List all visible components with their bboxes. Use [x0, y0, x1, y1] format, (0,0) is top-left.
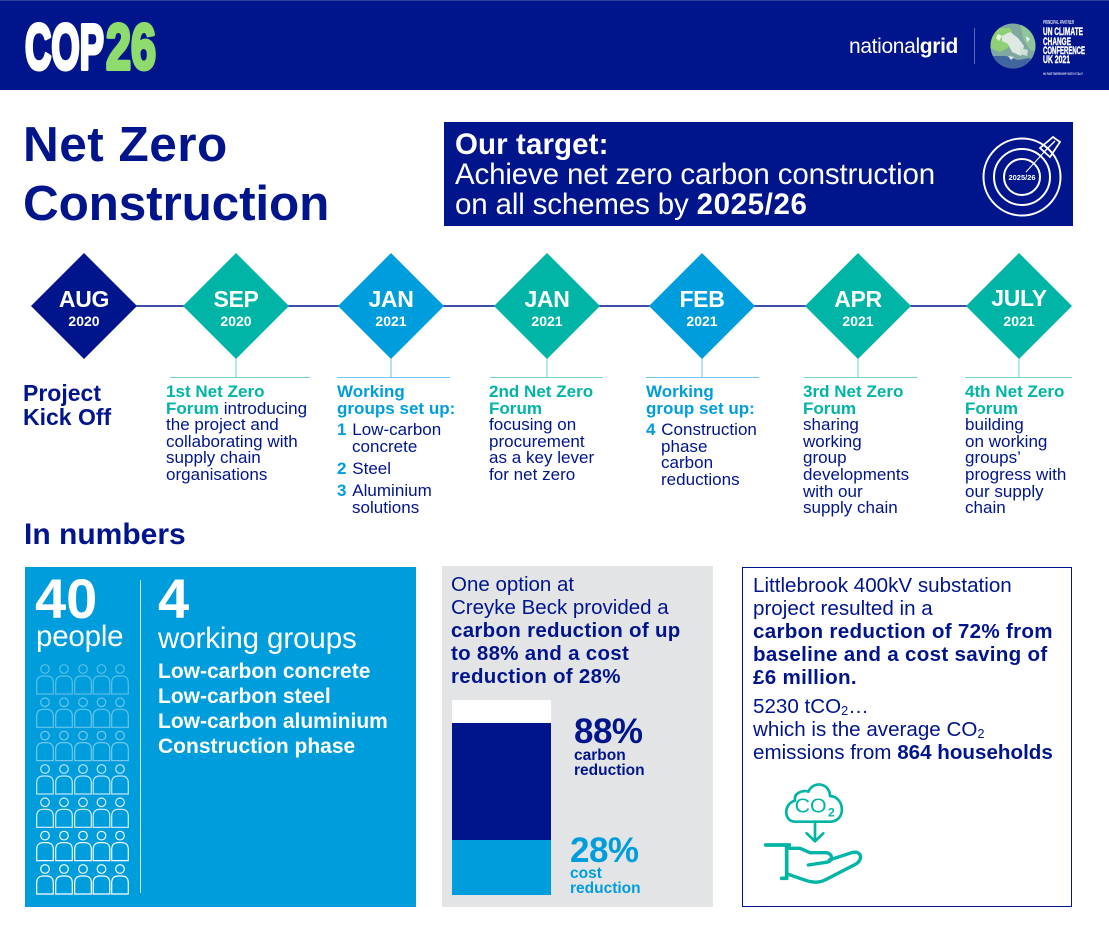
label: people: people — [36, 620, 123, 653]
stat: 28% cost reduction: 28% — [570, 831, 639, 870]
milestone: SEP 2020 — [183, 253, 289, 359]
list of working groups: Construction phase — [158, 735, 355, 758]
text: 4th forum: Forum — [965, 399, 1018, 418]
title: Net Zero — [23, 117, 228, 172]
list of working groups — [158, 660, 388, 758]
UN climate change conference lockup: UK 2021 — [1043, 54, 1070, 66]
header band — [0, 0, 1109, 90]
text: working groups set up: 2 Steel — [337, 459, 391, 478]
text: Littlebrook summary — [753, 574, 1053, 689]
text: working group set up: group set up: — [646, 399, 755, 418]
milestone: AUG 2020 — [31, 253, 136, 359]
text: Creyke Beck summary — [451, 573, 681, 688]
icon: CO2 in hand — [764, 783, 862, 884]
icon: CO2 in hand: CO — [795, 796, 827, 818]
text: 4th forum: groups’ — [965, 448, 1021, 467]
text: 3rd forum: developments — [803, 465, 909, 484]
milestone: FEB 2021 — [649, 253, 755, 359]
text: 3rd forum: sharing — [803, 415, 859, 434]
National Grid logo: nationalgrid — [849, 35, 958, 58]
milestone: APR 2021: 2021 — [842, 313, 874, 329]
icon: CO2 in hand: 2 — [828, 806, 835, 820]
panel: Littlebrook — [742, 567, 1072, 907]
list of working groups: Low-carbon aluminium — [158, 710, 388, 733]
text: working groups set up: concrete — [352, 437, 417, 456]
milestone: JULY 2021: 2021 — [1003, 313, 1035, 329]
text: 2nd forum: Forum — [489, 399, 542, 418]
text: 3rd forum: supply chain — [803, 498, 898, 517]
text: working groups set up — [337, 382, 455, 517]
icon: target with dart — [982, 136, 1062, 216]
globe icon — [990, 24, 1036, 68]
text: 2nd forum: procurement — [489, 432, 585, 451]
text: 1st forum — [166, 382, 307, 484]
list of working groups: Low-carbon concrete — [158, 660, 370, 682]
text: project kick off: Project — [23, 380, 101, 406]
timeline connector and stems — [136, 305, 1072, 378]
chart: stacked bar — [452, 700, 551, 895]
milestone: JAN 2021 second: JAN — [524, 286, 570, 312]
text: 1st forum: collaborating with — [166, 432, 298, 451]
stat: 4 working groups: 4 — [158, 567, 189, 630]
text: working groups set up: 3 Aluminium — [337, 481, 432, 500]
text: household equivalent: 5230 tCO2… — [753, 695, 869, 718]
text: 4th forum: chain — [965, 498, 1006, 517]
milestone: SEP 2020: SEP — [213, 286, 259, 312]
text: working group set up — [646, 382, 757, 489]
milestone: AUG 2020: AUG — [59, 286, 109, 312]
milestone: FEB 2021: FEB — [679, 286, 725, 312]
target text: on all schemes by 2025/26 — [455, 188, 807, 221]
text: working groups set up: groups set up: — [337, 399, 455, 418]
text: working group set up: carbon — [661, 453, 713, 472]
text: 4th forum: on working — [965, 432, 1047, 451]
text: Littlebrook summary: Littlebrook 400kV substation — [753, 574, 1012, 597]
text: 3rd forum: group — [803, 448, 847, 467]
milestone: JAN 2021 second: 2021 — [531, 313, 563, 329]
text: 1st forum: 1st Net Zero — [166, 382, 264, 401]
text: 2nd forum: focusing on — [489, 415, 576, 434]
text: 2nd forum: 2nd Net Zero — [489, 382, 593, 401]
text: working group set up: 4 Construction — [646, 420, 757, 439]
milestone: JAN 2021 second — [494, 253, 600, 359]
text: 3rd forum: working — [803, 432, 862, 451]
heading: in numbers: In numbers — [24, 518, 186, 551]
text: working group set up: phase — [661, 437, 707, 456]
text: household equivalent — [753, 695, 1053, 764]
text: project kick off: Kick Off — [23, 404, 111, 430]
milestone: JULY 2021: JULY — [991, 285, 1047, 311]
text: 1st forum: organisations — [166, 465, 267, 484]
UN climate change conference lockup — [1043, 20, 1085, 76]
list of working groups: Low-carbon steel — [158, 685, 331, 708]
label: working groups: working groups — [158, 622, 357, 655]
stat: 28% cost reduction: cost — [570, 864, 602, 882]
text: 3rd forum — [803, 382, 909, 517]
panel: people and working groups — [25, 567, 416, 907]
text: 1st forum: the project and — [166, 415, 279, 434]
text: household equivalent: which is the average CO2 — [753, 718, 984, 741]
text: working group set up: reductions — [661, 470, 740, 489]
target text: Our target: — [455, 128, 609, 161]
text: Creyke Beck summary: One option at — [451, 573, 574, 596]
text: Littlebrook summary: £6 million. — [753, 666, 857, 689]
text: 1st forum: Forum introducing — [166, 399, 307, 418]
stat: 88% carbon reduction — [574, 712, 645, 778]
text: 1st forum: supply chain — [166, 448, 261, 467]
milestone: APR 2021 — [805, 253, 911, 359]
milestone: FEB 2021: 2021 — [686, 313, 718, 329]
text: 3rd forum: Forum — [803, 399, 856, 418]
text: 4th forum: our supply — [965, 482, 1044, 501]
icon: target with dart: 2025/26 — [1008, 173, 1036, 182]
text: Littlebrook summary: project resulted in a — [753, 597, 933, 620]
milestone: APR 2021: APR — [834, 286, 882, 312]
title: Construction — [23, 176, 329, 231]
stat: 88% carbon reduction: carbon — [574, 746, 626, 764]
stat: 40 people: 40 — [35, 567, 97, 630]
milestone: JULY 2021 — [966, 253, 1072, 359]
text: 4th forum: building — [965, 415, 1024, 434]
stat: 28% cost reduction: reduction — [570, 880, 641, 896]
text: 2nd forum — [489, 382, 594, 484]
text: working group set up: Working — [646, 382, 714, 401]
text: household equivalent: emissions from 864 households — [753, 741, 1053, 764]
pictogram: 35 people — [36, 664, 129, 895]
text: Littlebrook summary: baseline and a cost saving of — [753, 643, 1048, 666]
panel: Creyke Beck — [442, 566, 713, 907]
milestone: AUG 2020: 2020 — [68, 313, 100, 329]
milestone: JAN 2021: 2021 — [375, 313, 407, 329]
target text: Achieve net zero carbon construction — [455, 158, 935, 191]
text: 4th forum: progress with — [965, 465, 1066, 484]
text: Creyke Beck summary: carbon reduction of up — [451, 619, 681, 642]
text: working groups set up: Working — [337, 382, 405, 401]
text: 3rd forum: 3rd Net Zero — [803, 382, 903, 401]
text: working groups set up: solutions — [352, 498, 419, 517]
text: Littlebrook summary: carbon reduction of 72% from — [753, 620, 1053, 643]
title — [23, 117, 329, 231]
text: Creyke Beck summary: reduction of 28% — [451, 665, 621, 688]
text: 3rd forum: with our — [803, 482, 863, 501]
target text — [455, 128, 935, 221]
text: 4th forum — [965, 382, 1066, 517]
milestone: SEP 2020: 2020 — [220, 313, 252, 329]
text: Creyke Beck summary: to 88% and a cost — [451, 642, 629, 665]
text: working groups set up: 1 Low-carbon — [337, 420, 441, 439]
milestone: JAN 2021: JAN — [368, 286, 414, 312]
text: 2nd forum: for net zero — [489, 465, 575, 484]
stat: 88% carbon reduction: 88% — [574, 712, 643, 751]
text: 4th forum: 4th Net Zero — [965, 382, 1064, 401]
text: 2nd forum: as a key lever — [489, 448, 594, 467]
text: Creyke Beck summary: Creyke Beck provided a — [451, 596, 669, 619]
stat: 28% cost reduction — [570, 831, 641, 896]
stat: 88% carbon reduction: reduction — [574, 762, 645, 778]
target panel — [444, 122, 1073, 226]
milestone: JAN 2021 — [338, 253, 444, 359]
text: project kick off — [23, 380, 112, 430]
